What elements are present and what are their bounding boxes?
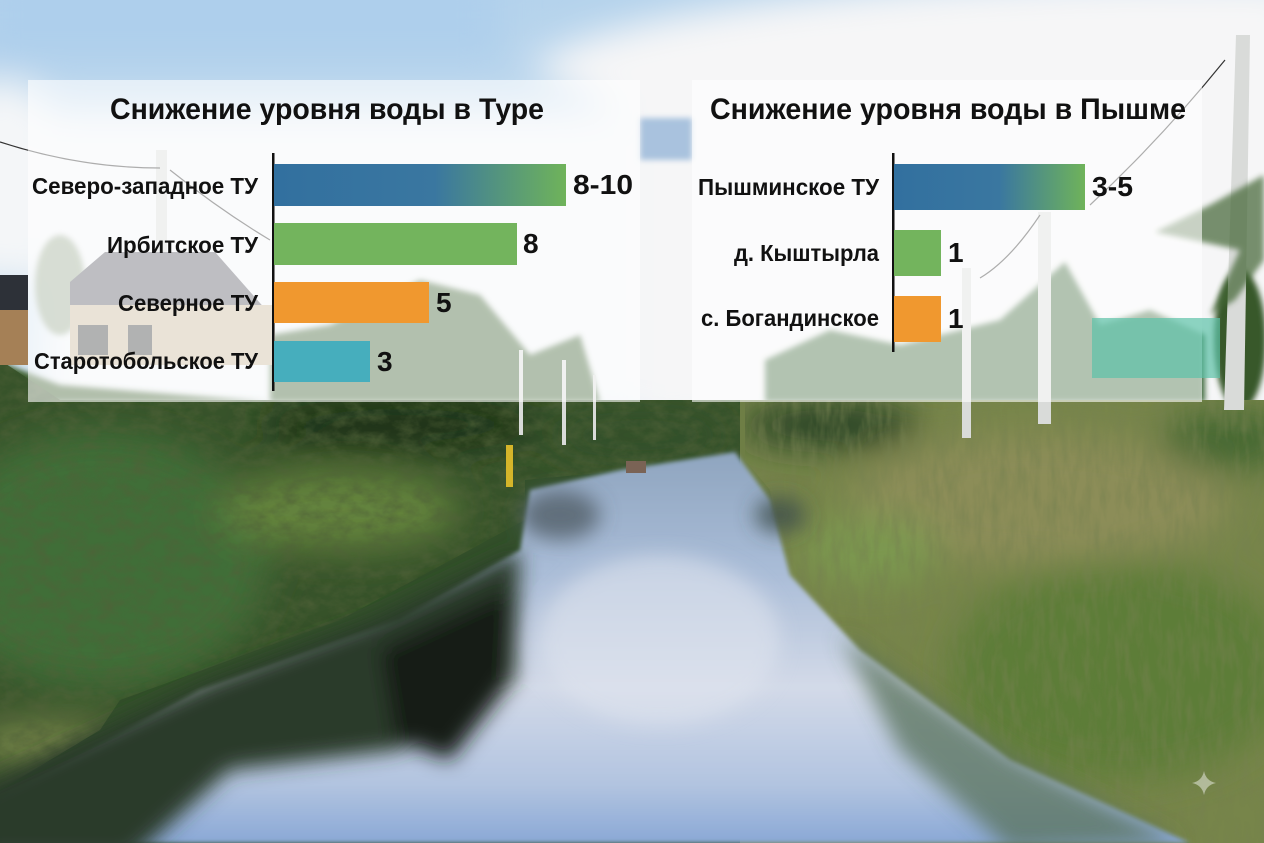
teal patch in photo bbox=[1092, 318, 1220, 378]
bar: Ирбитское ТУ: Ирбитское ТУ bbox=[107, 232, 258, 258]
bar: Северо-западное ТУ: 8-10 bbox=[573, 169, 633, 200]
heading: Pyshma: Снижение уровня воды в Пышме bbox=[710, 93, 1186, 126]
water reflections bbox=[0, 490, 1180, 843]
bar: Северо-западное ТУ: Северо-западное ТУ bbox=[32, 173, 258, 199]
bar: Ирбитское ТУ bbox=[107, 223, 539, 265]
panel background bbox=[692, 80, 1202, 402]
bar: Северное ТУ: 5 bbox=[436, 287, 452, 318]
trees behind panels bbox=[0, 235, 1264, 410]
panel: Tura chart bbox=[28, 80, 640, 402]
bar: с. Богандинское bbox=[701, 296, 964, 342]
bar: с. Богандинское: с. Богандинское bbox=[701, 305, 879, 331]
right foliage on pole bbox=[1155, 175, 1264, 315]
bar: Старотобольское ТУ: 3 bbox=[377, 346, 393, 377]
bar: Северо-западное ТУ bbox=[32, 164, 633, 206]
panel background bbox=[28, 80, 640, 402]
left vegetation bbox=[0, 365, 740, 778]
icon: sparkle watermark bbox=[1192, 771, 1216, 795]
bar: Ирбитское ТУ: 8 bbox=[523, 228, 539, 259]
house bbox=[0, 275, 28, 365]
bar: Северное ТУ bbox=[118, 282, 452, 323]
bar: с. Богандинское: 1 bbox=[948, 303, 964, 334]
base ground bbox=[0, 400, 740, 843]
bar: Старотобольское ТУ: Старотобольское ТУ bbox=[34, 348, 258, 374]
bar: д. Кыштырла: д. Кыштырла bbox=[734, 240, 880, 266]
panel: Pyshma chart bbox=[692, 80, 1220, 402]
bar: Старотобольское ТУ bbox=[34, 341, 393, 382]
blue sky gap between panels bbox=[640, 118, 692, 160]
right vegetation bbox=[740, 400, 1264, 843]
bar chart: Tura bbox=[32, 153, 633, 391]
bar: Северное ТУ: Северное ТУ bbox=[118, 290, 258, 316]
heading: Tura: Снижение уровня воды в Туре bbox=[110, 93, 544, 126]
poles and wires bbox=[156, 35, 1250, 445]
bar: Пышминское ТУ bbox=[698, 164, 1133, 210]
bar: д. Кыштырла bbox=[734, 230, 964, 276]
bar: д. Кыштырла: 1 bbox=[948, 237, 964, 268]
bar: Пышминское ТУ: Пышминское ТУ bbox=[698, 174, 879, 200]
bar chart: Pyshma bbox=[698, 153, 1133, 352]
bar: Пышминское ТУ: 3-5 bbox=[1092, 171, 1133, 202]
water bbox=[0, 452, 1190, 843]
